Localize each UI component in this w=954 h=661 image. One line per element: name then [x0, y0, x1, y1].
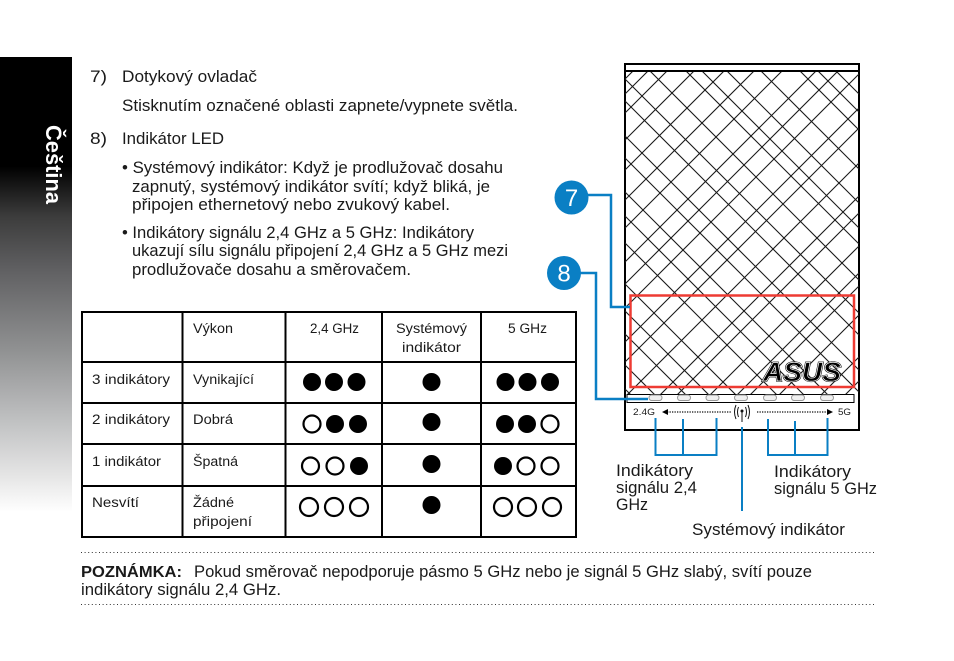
band labels and arrows: 5G [838, 407, 851, 417]
text block: item 8: Indikátor LED [122, 130, 224, 148]
label: 5 GHz indicators: signálu 5 GHz [774, 480, 877, 498]
note with dotted rules: POZNÁMKA: [81, 564, 182, 581]
table indicator dots: lit [303, 373, 559, 514]
table header row: Výkon [193, 321, 233, 336]
router illustration [624, 63, 860, 431]
table header row [193, 321, 547, 355]
label: 2.4 GHz indicators: Indikátory [616, 462, 694, 480]
callout 7 with leader: 7 [565, 185, 578, 212]
table header row: 2,4 GHz [310, 321, 359, 336]
table header row: Systémový [396, 321, 467, 336]
text block: item 8: 8) [90, 130, 107, 148]
sidebar label: Čeština [41, 125, 66, 205]
table row labels: 1 indikátor [92, 454, 162, 469]
icon: wireless system indicator [734, 405, 750, 422]
text block: item 8: • Systémový indikátor: Když je prodlužovač dosahu [122, 159, 503, 177]
table header row: indikátor [402, 340, 462, 355]
table header row: 5 GHz [508, 321, 547, 336]
text block: item 7: Dotykový ovladač [122, 68, 257, 86]
label: 5 GHz indicators [774, 463, 877, 498]
text block: item 7: Stisknutím označené oblasti zapnete/vypnete světla. [122, 97, 518, 115]
text block: item 8 [90, 130, 508, 279]
text block: item 8: připojen ethernetový nebo zvukový kabel. [132, 196, 450, 214]
table row labels: Nesvítí [92, 495, 139, 510]
ASUS logo: ASUS [762, 357, 841, 387]
bracket: 5 GHz indicators [768, 418, 828, 455]
LED strip [627, 394, 854, 402]
text block: item 8: ukazují sílu signálu připojení 2,4 GHz a 5 GHz mezi [132, 242, 508, 260]
note with dotted rules: indikátory signálu 2,4 GHz. [81, 581, 281, 599]
text block: item 7 [90, 68, 518, 115]
red highlight: touch control area [630, 296, 854, 387]
label: system indicator: Systémový indikátor [692, 521, 846, 539]
table row labels: 3 indikátory [92, 372, 170, 387]
table row labels: Žádné [193, 495, 234, 510]
callout 8 with leader: 8 [557, 260, 571, 288]
note with dotted rules [81, 552, 875, 604]
table: LED signal states [82, 312, 576, 537]
ASUS logo: ASUS [762, 357, 841, 387]
table row labels: připojení [193, 514, 252, 529]
label: 2.4 GHz indicators: GHz [616, 496, 648, 514]
text block: item 8: zapnutý, systémový indikátor svítí; když bliká, je [132, 178, 490, 196]
text block: item 8: prodlužovače dosahu a směrovačem. [132, 261, 411, 279]
table row labels: Dobrá [193, 412, 234, 427]
label: 5 GHz indicators: Indikátory [774, 463, 852, 481]
band labels and arrows [633, 405, 851, 422]
band labels and arrows: 2.4G [633, 407, 655, 417]
text block: item 7: 7) [90, 68, 107, 86]
table row labels [92, 372, 254, 529]
table indicator dots: unlit [300, 416, 561, 516]
leader: system indicator [741, 427, 743, 511]
bracket: 2.4 GHz indicators [656, 418, 716, 455]
label: 2.4 GHz indicators: signálu 2,4 [616, 479, 697, 497]
callout 8 with leader [547, 256, 648, 399]
table row labels: Vynikající [193, 372, 254, 387]
note with dotted rules: Pokud směrovač nepodporuje pásmo 5 GHz nebo je signál 5 GHz slabý, svítí pouze [194, 563, 812, 581]
text block: item 8: • Indikátory signálu 2,4 GHz a 5 GHz: Indikátory [122, 224, 475, 242]
table row labels: 2 indikátory [92, 412, 170, 427]
table row labels: Špatná [193, 454, 239, 469]
router crosshatch pattern [625, 72, 859, 394]
label: 2.4 GHz indicators [616, 462, 697, 514]
callout 7 with leader [554, 180, 630, 307]
sidebar: language tab [0, 57, 72, 512]
